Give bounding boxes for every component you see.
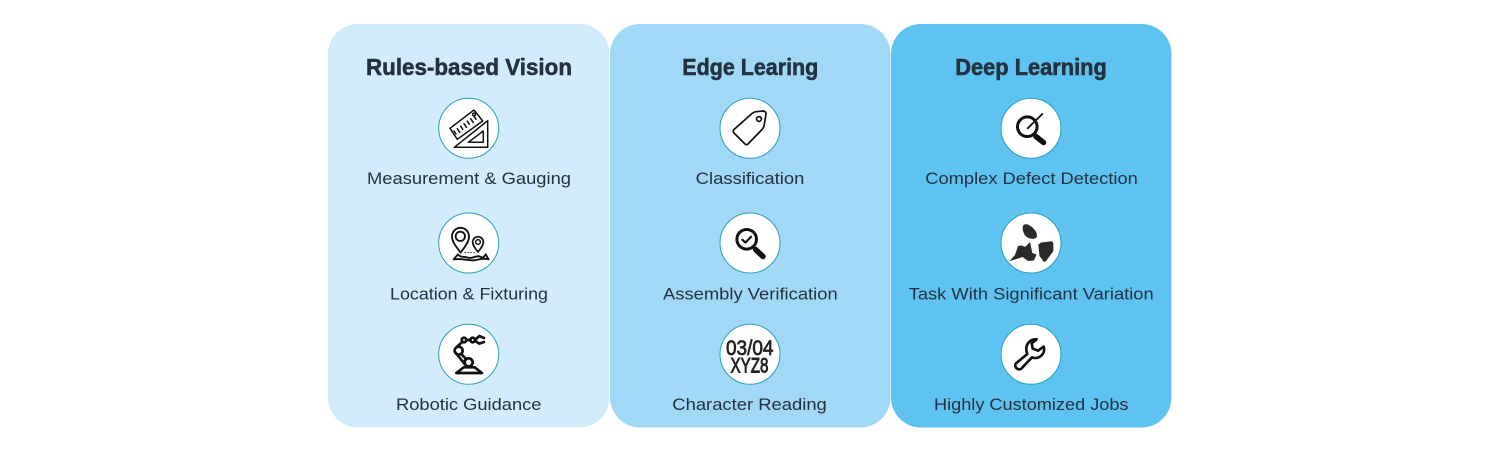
- panel: Rules-based Vision: [328, 24, 610, 428]
- icon: wrench: [1001, 324, 1061, 384]
- icon: irregular shapes: [1001, 213, 1061, 273]
- icon: printed characters 03/04 XYZ8: 03/04: [726, 337, 774, 360]
- icon: printed characters 03/04 XYZ8: XYZ8: [730, 353, 769, 377]
- label: Classification: Classification: [696, 170, 804, 188]
- label: Location & Fixturing: Location & Fixturing: [390, 286, 548, 304]
- icon: location pins on map: [439, 213, 499, 273]
- heading: Edge Learing: Edge Learing: [682, 54, 818, 80]
- label: Assembly Verification: Assembly Verification: [663, 286, 838, 304]
- label: Complex Defect Detection: Complex Defect Detection: [925, 170, 1138, 188]
- label: Highly Customized Jobs: Highly Customized Jobs: [934, 396, 1128, 414]
- icon: robotic arm: [439, 324, 499, 384]
- icon: price tag: [720, 98, 780, 158]
- label: Task With Significant Variation: Task With Significant Variation: [909, 286, 1154, 304]
- icon: magnifier over defect line: [1001, 98, 1061, 158]
- label: Character Reading: Character Reading: [672, 396, 827, 414]
- icon: magnifier with check mark: [720, 213, 780, 273]
- panel: Deep Learning: [891, 24, 1172, 428]
- label: Measurement & Gauging: Measurement & Gauging: [367, 170, 571, 188]
- icon: printed characters 03/04 XYZ8: [720, 324, 780, 384]
- icon: ruler and set square: [439, 98, 499, 158]
- heading: Deep Learning: Deep Learning: [955, 54, 1107, 80]
- panel: Edge Learning: [610, 24, 890, 428]
- heading: Rules-based Vision: Rules-based Vision: [366, 54, 572, 80]
- label: Robotic Guidance: Robotic Guidance: [396, 396, 542, 414]
